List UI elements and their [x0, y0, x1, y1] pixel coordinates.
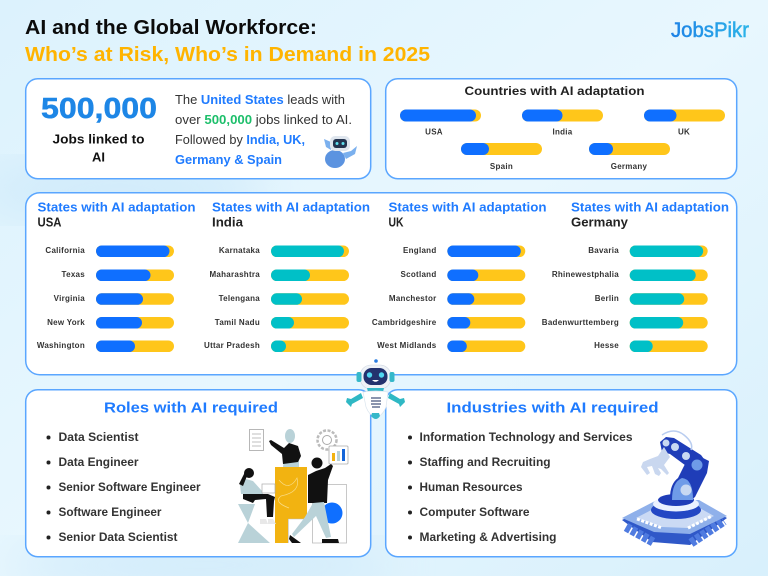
illustration: team at work [238, 429, 348, 543]
column: Germany: States with AI adaptation [571, 200, 729, 214]
heading: Roles with AI required [104, 400, 278, 416]
bar: Germany: Germany [611, 162, 648, 171]
panel: states with AI adaptation [26, 193, 737, 375]
industries list: Marketing & Advertising [420, 532, 556, 544]
bar: Spain [461, 143, 542, 171]
column: USA: California [45, 246, 85, 255]
column: UK: Manchestor [389, 294, 436, 303]
column: USA: Virginia [54, 294, 85, 303]
summary text: The United States leads with [175, 92, 345, 107]
column: Germany: Bavaria [588, 246, 619, 255]
column: UK: England [403, 246, 436, 255]
industries list: Human Resources [420, 482, 522, 494]
column: India: Maharashtra [209, 270, 260, 279]
column: Germany: Badenwurttemberg [542, 318, 619, 327]
column: USA: New York [47, 318, 85, 327]
panel: industries with AI required [386, 390, 737, 557]
panel: jobs headline [26, 79, 371, 179]
heading: Industries with AI required [446, 400, 658, 416]
summary text: over 500,000 jobs linked to AI. [175, 112, 352, 127]
column: India: Uttar Pradesh [204, 341, 260, 350]
bar: India [522, 110, 603, 136]
column: Germany: Berlin [595, 294, 619, 303]
big number: 500,000 [41, 93, 157, 125]
bar: USA: USA [425, 128, 443, 136]
column: USA: USA [38, 216, 62, 230]
column: UK: Scotland [401, 270, 436, 279]
bar: Spain: Spain [490, 162, 513, 171]
title: AI and the Global Workforce: [25, 17, 317, 39]
summary text: Germany & Spain [175, 152, 282, 167]
logo: JobsPikr: JobsPikr [671, 19, 749, 42]
column: Germany: Hesse [594, 341, 619, 350]
woman seated [238, 468, 276, 543]
roles list: Software Engineer [58, 507, 162, 519]
roles list: Data Scientist [58, 432, 139, 444]
column: UK: Cambridgeshire [372, 318, 437, 327]
title: Who’s at Risk, Who’s in Demand in 2025 [25, 44, 430, 66]
column: USA [37, 200, 196, 352]
woman standing [269, 429, 301, 467]
column: India: Karnataka [219, 246, 260, 255]
bar: UK [644, 110, 725, 136]
column: Germany: Rhinewestphalia [552, 270, 619, 279]
column: Germany: Germany [571, 216, 628, 230]
panel: roles with AI required [26, 390, 371, 557]
column: India: India [212, 216, 244, 230]
roles list: Senior Data Scientist [58, 532, 178, 544]
big number caption: AI [92, 150, 105, 164]
roles list: Data Engineer [58, 457, 139, 469]
column: UK: UK [388, 216, 404, 230]
industries list: Computer Software [420, 507, 530, 519]
column: India: Telengana [219, 294, 260, 303]
panel: countries with AI adaptation [386, 79, 737, 179]
column: India [204, 200, 370, 352]
chart card [329, 446, 348, 464]
roles list: Senior Software Engineer [58, 482, 201, 494]
heading: Countries with AI adaptation [464, 84, 644, 98]
column: USA: States with AI adaptation [38, 200, 196, 214]
bar: USA [400, 110, 481, 136]
column: India: States with AI adaptation [212, 200, 370, 214]
man walking [289, 458, 339, 543]
illustration: robot arm [622, 431, 727, 545]
industries list: Staffing and Recruiting [420, 457, 550, 469]
icon: central robot [346, 359, 405, 419]
summary text [175, 92, 352, 167]
column: USA: Texas [62, 270, 85, 279]
column: UK: West Midlands [377, 341, 437, 350]
bar: India: India [552, 128, 573, 136]
big number caption: Jobs linked to [52, 132, 145, 146]
bar: Germany [589, 143, 670, 171]
column: UK [372, 200, 546, 352]
column: Germany [542, 200, 729, 352]
big number caption [52, 132, 145, 164]
column: India: Tamil Nadu [215, 318, 260, 327]
roles list [46, 432, 201, 544]
column: UK: States with AI adaptation [388, 200, 546, 214]
column: USA: Washington [37, 341, 85, 350]
industries list: Information Technology and Services [420, 432, 632, 444]
icon: small robot [324, 136, 357, 168]
summary text: Followed by India, UK, [175, 132, 305, 147]
industries list [408, 432, 632, 544]
bar: UK: UK [678, 128, 690, 136]
title [25, 17, 430, 66]
